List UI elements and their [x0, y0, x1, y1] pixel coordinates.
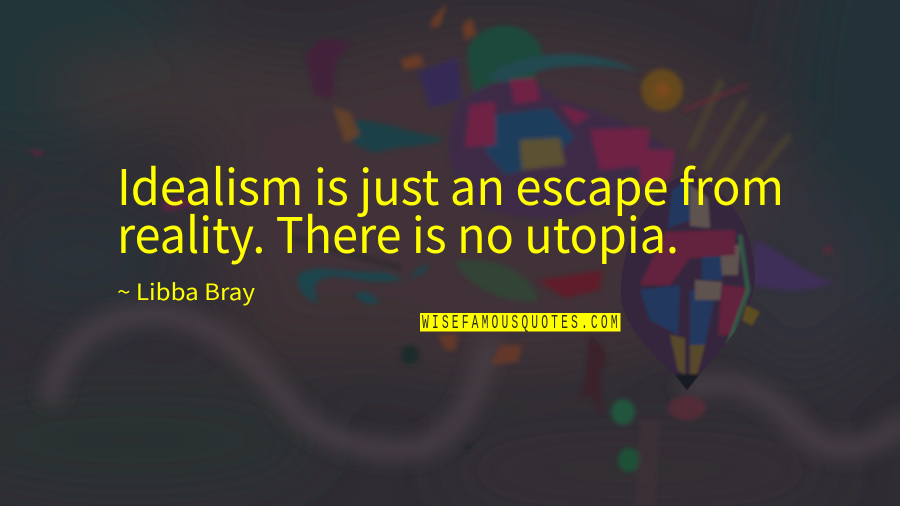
watermark badge: WISEFAMOUSQUOTES.COM: [422, 312, 618, 334]
splash: hanging vine: [578, 335, 606, 417]
splash: orange bottom blots: [438, 333, 522, 365]
splash: central colour mass: [448, 81, 680, 218]
icon: balloon gold tag: [742, 305, 760, 326]
splash: yellow flower: [641, 69, 683, 111]
splash: dark curl: [298, 265, 430, 304]
splash: purple fan: [418, 57, 462, 108]
splash: magenta left marks: [28, 150, 195, 212]
splash: small ink dot: [464, 444, 472, 450]
balloon: green seams: [728, 235, 748, 345]
splash: deep blue patch: [485, 108, 575, 175]
icon: hot-air balloon: [621, 174, 755, 390]
splash: pink drip: [635, 420, 660, 506]
splash: crimson patches: [465, 78, 675, 185]
balloon: pale checks: [690, 185, 740, 300]
quote text: [117, 149, 784, 268]
splash: orange flower centre: [654, 82, 670, 98]
splash: red stroke: [683, 85, 748, 110]
balloon: blue panels: [640, 178, 726, 345]
splash: green lower drop: [618, 448, 640, 472]
splash: right ring: [824, 246, 832, 254]
splash: green top blot: [468, 26, 542, 106]
splash: right ink dot: [844, 206, 850, 212]
splash: gold patch: [520, 138, 565, 170]
balloon: crimson panels: [640, 230, 748, 335]
splash: thick dark line: [292, 238, 400, 268]
splash: lower red fan: [537, 270, 602, 298]
splash: pale yellow rays: [690, 80, 790, 190]
splash: left ribbon block: [305, 38, 350, 100]
splash: green lower wash: [455, 260, 538, 301]
splash: green drop: [611, 399, 635, 425]
splash: orange left drip: [333, 107, 360, 143]
splash: dark ink dot: [400, 346, 420, 364]
splash: teal wing: [342, 120, 445, 153]
background: pale ribbon wave: [52, 314, 900, 450]
splash: orange drips: [400, 3, 476, 70]
quote line 2: reality. There is no utopia.: [117, 197, 679, 268]
author attribution: ~ Libba Bray: [117, 275, 255, 307]
quote line 1: Idealism is just an escape from: [117, 149, 784, 220]
splash: teal sweep: [487, 54, 640, 85]
balloon: dark basket tip: [674, 374, 700, 391]
balloon: gold lower panels: [670, 335, 705, 375]
splash: pink bloom: [668, 396, 706, 420]
splash: purple veil: [752, 240, 836, 290]
